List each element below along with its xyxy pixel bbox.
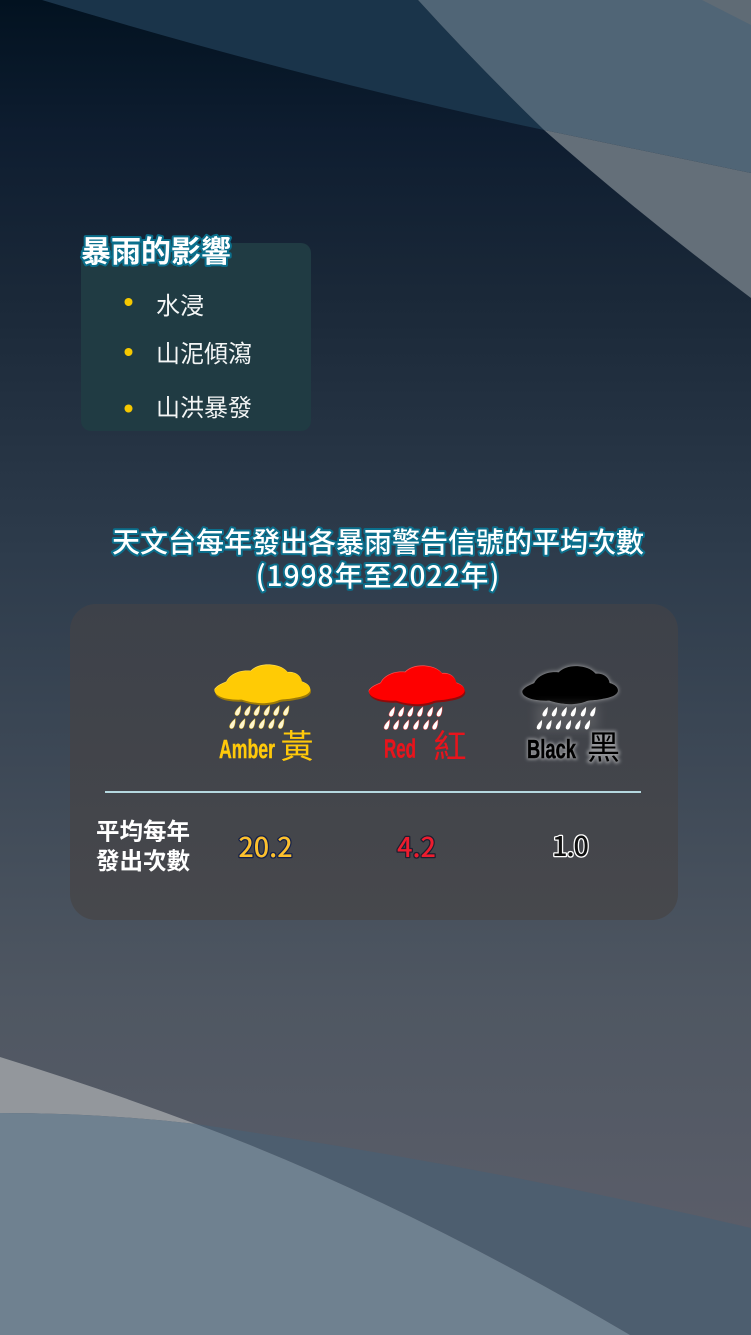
icon: black rainstorm signal: Black	[527, 736, 577, 764]
value: amber 20.2: 20.2	[238, 826, 293, 865]
panel background	[81, 243, 311, 431]
heading: impacts of heavy rain: 暴雨的影響	[81, 227, 231, 271]
top right decorative curved shapes	[42, 0, 751, 298]
value: black 1.0: 1.0	[552, 825, 589, 864]
icon: amber rainstorm signal	[214, 664, 314, 768]
icon: amber rainstorm signal: 黃	[280, 720, 314, 768]
list item: landslide: 山泥傾瀉	[156, 334, 252, 369]
icon: black rainstorm signal: 黑	[587, 721, 620, 769]
panel background	[70, 604, 678, 920]
heading: average annual rainstorm warning signals: 天文台每年發出各暴雨警告信號的平均次數	[112, 521, 644, 561]
icon: red rainstorm signal	[369, 665, 466, 768]
icon: black rainstorm signal: 黑	[587, 721, 620, 769]
row label: average annual issuances: 平均每年	[96, 812, 190, 846]
bottom left decorative curved shapes	[0, 1057, 751, 1335]
value: red 4.2: 4.2	[397, 826, 436, 865]
list item: flooding	[124, 286, 204, 321]
icon: black rainstorm signal: Black	[527, 736, 577, 764]
icon: black rainstorm signal	[522, 666, 620, 769]
row label: average annual issuances: 發出次數	[96, 842, 190, 876]
heading: average annual rainstorm warning signals: (1998年至2022年)	[256, 555, 500, 595]
list item: flash flood: 山洪暴發	[156, 388, 252, 423]
icon: red rainstorm signal: Red	[384, 736, 416, 764]
row label: average annual issuances	[96, 812, 190, 876]
panel: impacts of heavy rain	[81, 227, 311, 431]
icon: red rainstorm signal: 紅	[434, 720, 466, 768]
panel: signal table	[70, 604, 678, 920]
list item: flooding: 水浸	[156, 286, 204, 321]
heading: average annual rainstorm warning signals	[112, 521, 644, 595]
icon: amber rainstorm signal: Amber	[219, 736, 275, 764]
